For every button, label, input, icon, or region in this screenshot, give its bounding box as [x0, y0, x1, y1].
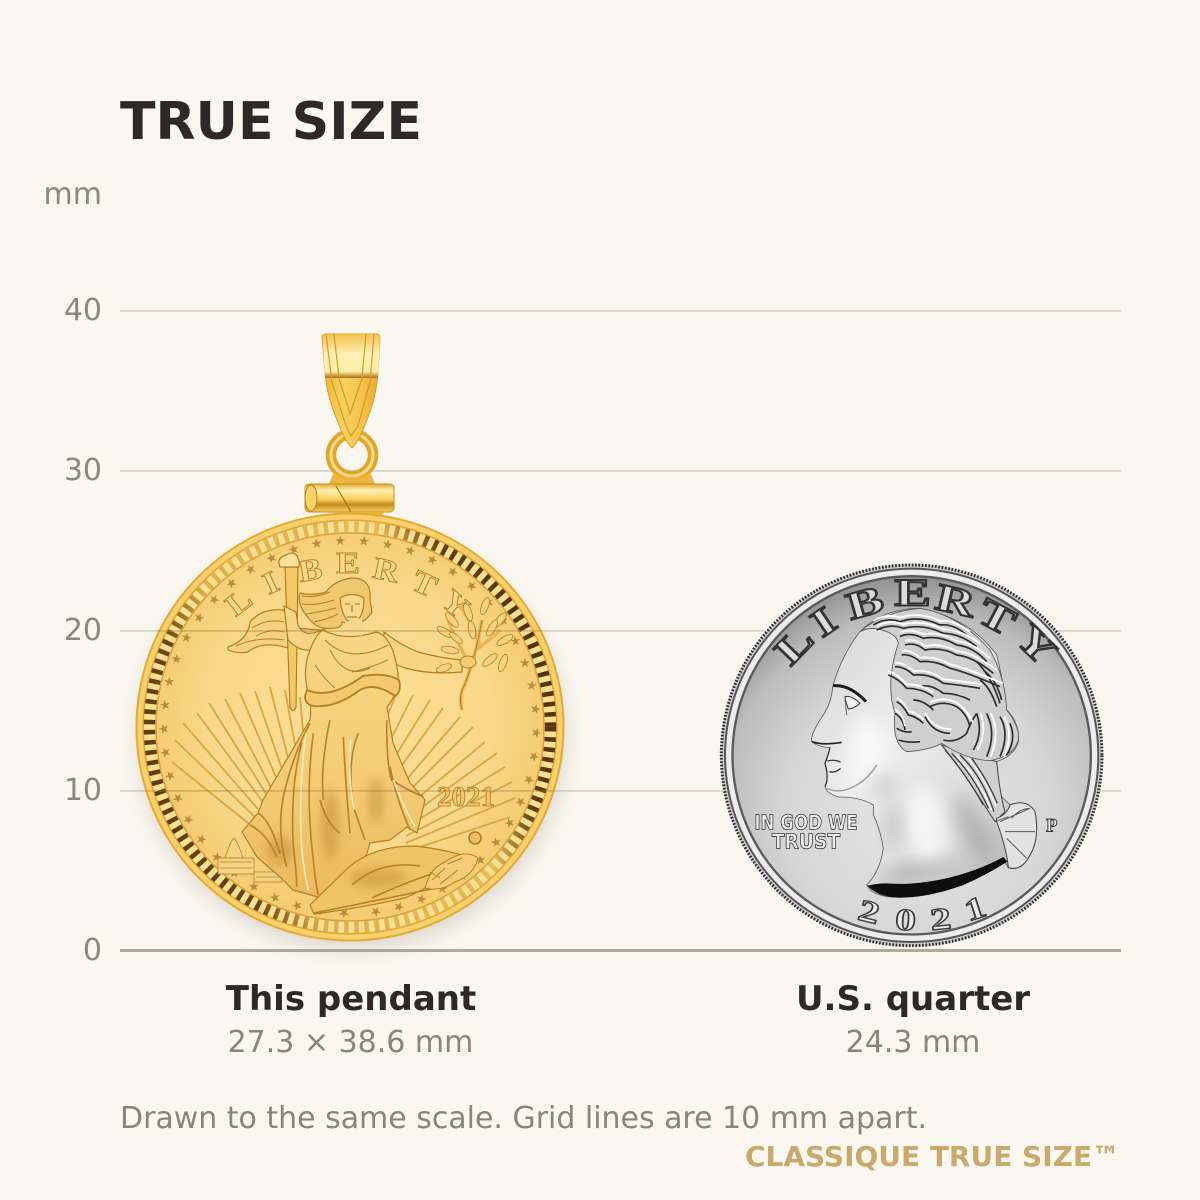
LIBERTY lettering on pendant: B — [296, 551, 325, 589]
axis tick labels: 30 — [64, 453, 102, 488]
mint mark — [469, 832, 481, 844]
LIBERTY on quarter: R — [932, 576, 980, 626]
neck and face shading — [848, 715, 1000, 888]
quarter field — [734, 577, 1090, 933]
date 2021 on quarter: 1 — [960, 890, 990, 928]
sash — [305, 675, 400, 706]
bezel tube — [305, 484, 394, 538]
dress — [242, 630, 425, 900]
axis unit label: mm — [44, 177, 102, 212]
coin field — [156, 533, 544, 921]
LIBERTY lettering on pendant — [219, 546, 476, 626]
jump ring — [328, 434, 376, 486]
LIBERTY lettering on pendant: R — [370, 551, 403, 590]
axis tick labels: 40 — [64, 293, 102, 328]
IN GOD WE TRUST: IN GOD WE — [754, 810, 858, 834]
pendant label: This pendant — [226, 979, 476, 1019]
drapery folds — [250, 720, 423, 895]
bail loop — [322, 334, 380, 448]
axis tick labels: 20 — [64, 613, 102, 648]
LIBERTY lettering on pendant: L — [219, 581, 259, 623]
LIBERTY lettering on pendant: I — [257, 565, 284, 602]
eye and mouth details — [845, 696, 860, 709]
olive branch — [448, 606, 500, 710]
rock and foliage — [310, 846, 470, 914]
extended arm — [384, 632, 462, 673]
ring of stars: ★★★★★★★★★★★★★★★★★★★★★★★★★★★★★★★★★★★★★★★★★★★★★★★★★ — [158, 536, 542, 918]
queue of hair — [942, 745, 1005, 822]
LIBERTY lettering on pendant: T — [406, 564, 442, 605]
Washington portrait — [811, 608, 1037, 898]
raised arm — [284, 606, 325, 650]
quarter illustration — [720, 564, 1103, 947]
flowing cape — [228, 610, 320, 653]
LIBERTY on quarter: Y — [1007, 616, 1065, 674]
reeded edge ticks — [150, 526, 550, 928]
sun rays — [172, 687, 515, 852]
title: TRUE SIZE — [120, 92, 422, 152]
IN GOD WE TRUST: TRUST — [772, 829, 840, 853]
footnote: Drawn to the same scale. Grid lines are 10 mm apart. — [120, 1101, 927, 1136]
date 2021 on quarter — [855, 890, 990, 937]
quarter edge — [720, 564, 1103, 947]
baseline axis — [120, 949, 1121, 952]
LIBERTY on quarter: L — [767, 618, 822, 673]
date 2021 on pendant: 2021 — [437, 781, 495, 813]
mint mark P: P — [1046, 816, 1057, 837]
bust shadow — [867, 857, 1007, 898]
ribbon bow — [997, 803, 1037, 868]
pendant illustration — [132, 334, 572, 956]
torch — [285, 567, 298, 710]
faint grid lines over pendant — [145, 631, 555, 791]
quarter dimensions: 24.3 mm — [846, 1025, 980, 1060]
LIBERTY lettering on pendant: E — [336, 546, 360, 580]
date 2021 on quarter: 0 — [894, 902, 917, 937]
skirt shading — [266, 778, 384, 864]
pendant dimensions: 27.3 × 38.6 mm — [228, 1025, 473, 1060]
date 2021 on quarter: 2 — [929, 901, 953, 937]
LIBERTY on quarter: T — [970, 590, 1022, 645]
date 2021 on quarter: 2 — [855, 893, 883, 931]
axis tick labels — [64, 293, 102, 968]
liberty figure — [228, 553, 515, 914]
head and hair — [299, 578, 372, 628]
quarter label: U.S. quarter — [796, 979, 1030, 1019]
LIBERTY on quarter: E — [895, 572, 931, 615]
LIBERTY on quarter — [767, 572, 1065, 674]
axis tick labels: 0 — [83, 933, 102, 968]
axis tick labels: 10 — [64, 773, 102, 808]
hair mass — [860, 608, 1019, 761]
capitol building — [218, 838, 282, 882]
blouse folds — [315, 640, 388, 688]
soft shadow — [140, 528, 564, 948]
head and bust — [811, 608, 1037, 897]
brand mark: CLASSIQUE TRUE SIZE™ — [745, 1140, 1120, 1173]
LIBERTY on quarter: I — [803, 599, 844, 646]
LIBERTY on quarter: B — [842, 578, 888, 629]
coin rim — [136, 512, 564, 942]
LIBERTY lettering on pendant: Y — [434, 583, 476, 626]
IN GOD WE TRUST — [754, 810, 858, 853]
